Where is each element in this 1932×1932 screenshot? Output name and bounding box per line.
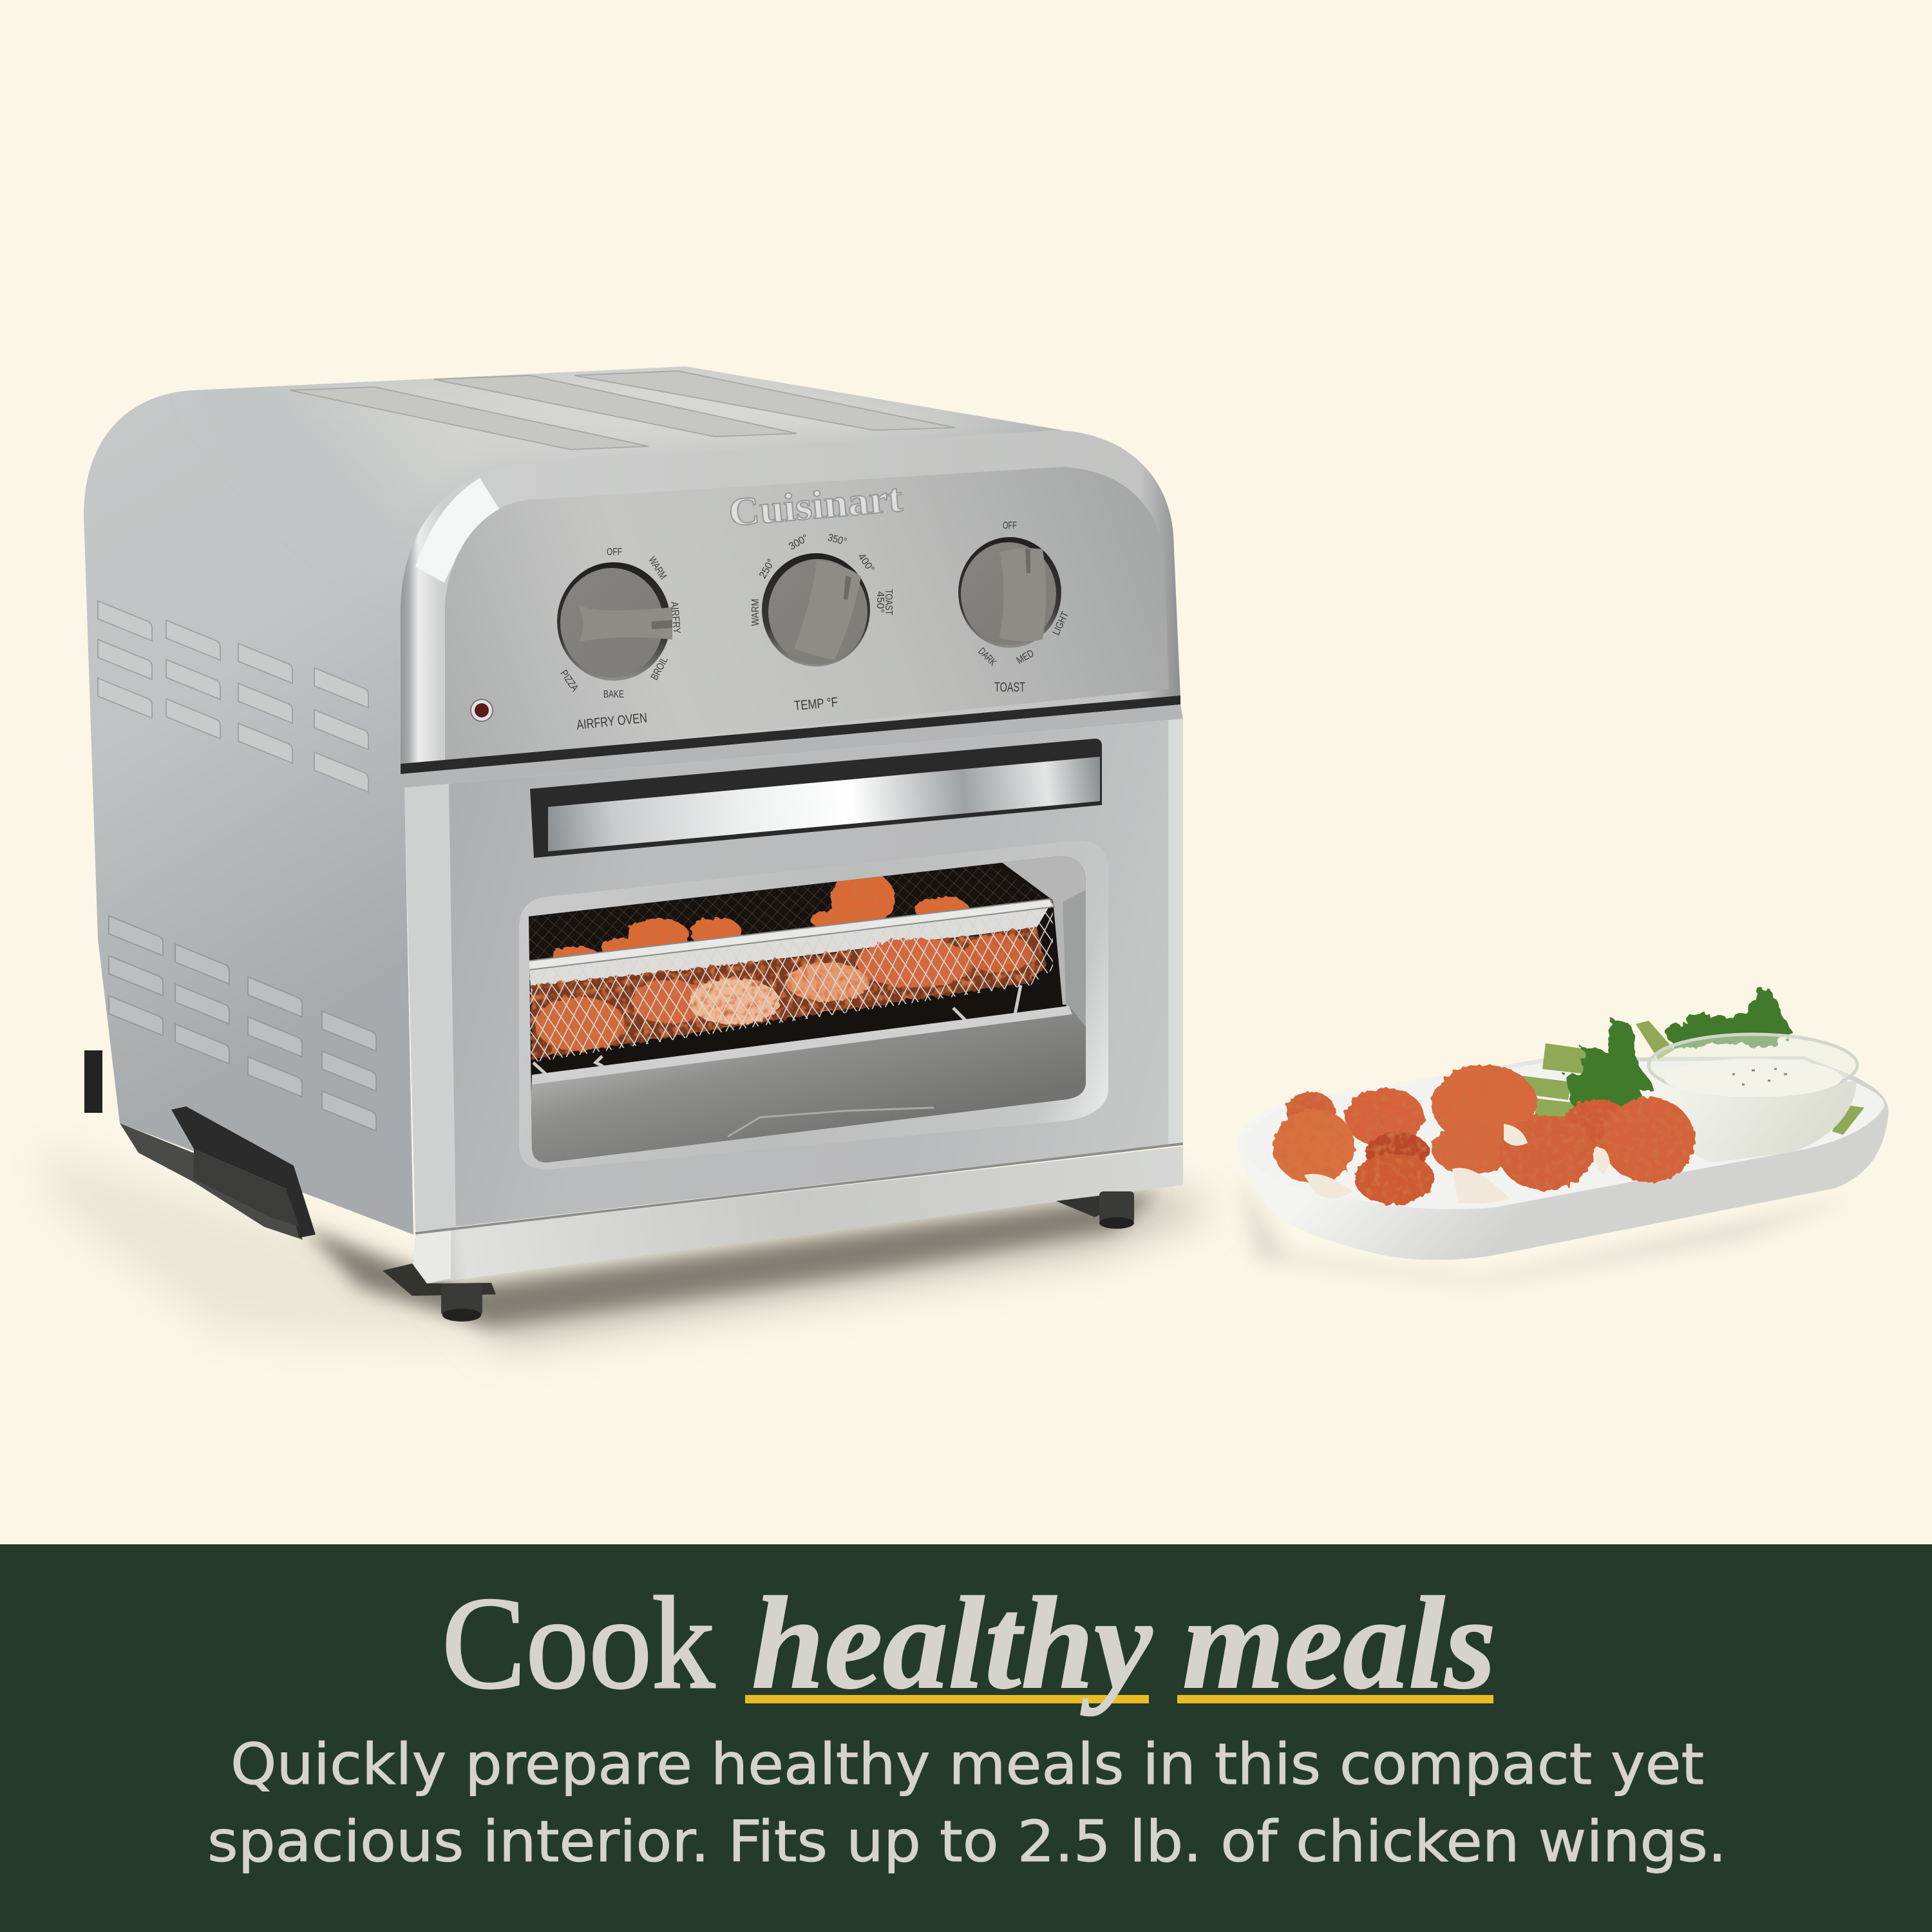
labels: airfry oven selector: OFF [607,547,622,558]
labels: toast: DARK [976,646,998,668]
bottom text panel [0,1544,1932,1932]
title underline: healthy [745,1695,1149,1703]
title: healthy [752,1570,1153,1716]
right wall shine [1063,890,1086,1095]
basket wire mesh [529,900,1053,1063]
left black strip [383,1264,496,1296]
left foot [383,1264,496,1321]
bezel highlights [415,478,499,583]
floor shadow left [39,1146,477,1346]
labels: temperature: TOAST [883,589,894,615]
pale stems [1304,1124,1610,1204]
labels: temperature: 300° [787,533,810,553]
labels: toast: TOAST [994,680,1025,695]
plate shadow [1240,1179,1855,1285]
door handle [530,739,1102,858]
florets [1273,1065,1695,1204]
floor shadow under oven [444,1191,1211,1346]
indicator light [471,699,493,721]
cord clip [171,1106,316,1238]
door right bevel [1168,719,1183,1144]
knob: toast [958,537,1061,648]
top surface [236,366,1025,497]
labels: temperature [750,532,894,714]
labels: airfry oven selector: AIRFRY OVEN [576,710,648,733]
dark oven cavity [525,850,1092,1172]
description [207,1731,1727,1875]
title [442,1570,1496,1716]
handle chrome [548,757,1100,851]
handle dark grip [530,739,1102,858]
labels: airfry oven selector: BROIL [649,655,670,682]
labels: temperature: 250° [757,557,777,580]
labels: airfry oven selector [558,547,682,733]
labels: temperature: WARM [750,599,761,626]
door top strip [401,705,1183,788]
knob: airfry oven selector [557,562,672,681]
plate outer [1238,1056,1888,1260]
dark underside [120,1123,303,1240]
plate of cauliflower with dip [1238,989,1888,1285]
base [413,1146,1183,1283]
tray lip [532,1006,1072,1084]
labels: temperature: 400° [855,551,876,574]
Cuisinart logo: Cuisinart [727,476,904,535]
black power tab [84,1050,102,1113]
oven side and top body [84,366,1063,1235]
drip tray [528,1006,1088,1172]
celery leaves [1565,989,1794,1117]
front bezel [401,430,1180,768]
base seam [415,1144,1183,1233]
labels: toast: MED [1015,648,1036,667]
base highlight [413,1230,451,1283]
side vents lower group [109,916,376,1131]
air fryer oven [39,361,1211,1346]
labels: toast: OFF [1003,520,1017,531]
title: Cook [442,1570,715,1716]
right foot [1056,1191,1134,1229]
labels: airfry oven selector: BAKE [603,689,624,700]
door left bevel [404,784,456,1231]
labels: toast [976,520,1071,695]
contact shadow under oven [303,1191,1159,1327]
title underline: meals [1177,1695,1493,1703]
basket interior white wall [529,900,1053,995]
labels: temperature: 450° [875,591,886,613]
seam line [401,696,1180,774]
rack legs [533,985,1021,1075]
window interior [525,850,1092,1172]
background [0,0,1932,1544]
celery sticks [1520,1021,1864,1135]
right interior wall [998,853,1088,1005]
side vents upper group [98,601,368,792]
window frame [519,840,1108,1170]
labels: temperature: TEMP °F [793,695,838,714]
labels: toast: LIGHT [1051,610,1071,637]
cavity back mesh [529,863,1053,962]
knob: temperature [762,553,870,667]
basket rim [529,899,1054,970]
title: meals [1182,1570,1496,1716]
labels: airfry oven selector: AIRFRY [668,601,682,634]
brushed control panel [445,467,1169,762]
basket food [531,927,1046,1059]
labels: temperature: 350° [826,532,848,548]
clip ridged block [193,1149,299,1227]
top vent slots [290,371,955,450]
dip cup [1649,1034,1857,1162]
tray handle notch [728,1108,934,1137]
description: spacious interior. Fits up to 2.5 lb. of chicken wings. [207,1808,1727,1875]
description: Quickly prepare healthy meals in this compact yet [231,1731,1704,1797]
buffalo cauliflower [1273,1065,1695,1204]
labels: airfry oven selector: PIZZA [558,668,580,694]
door [404,719,1183,1231]
plate inner surface [1243,1059,1884,1209]
labels: airfry oven selector: WARM [646,555,668,582]
food on rack top [553,876,969,957]
